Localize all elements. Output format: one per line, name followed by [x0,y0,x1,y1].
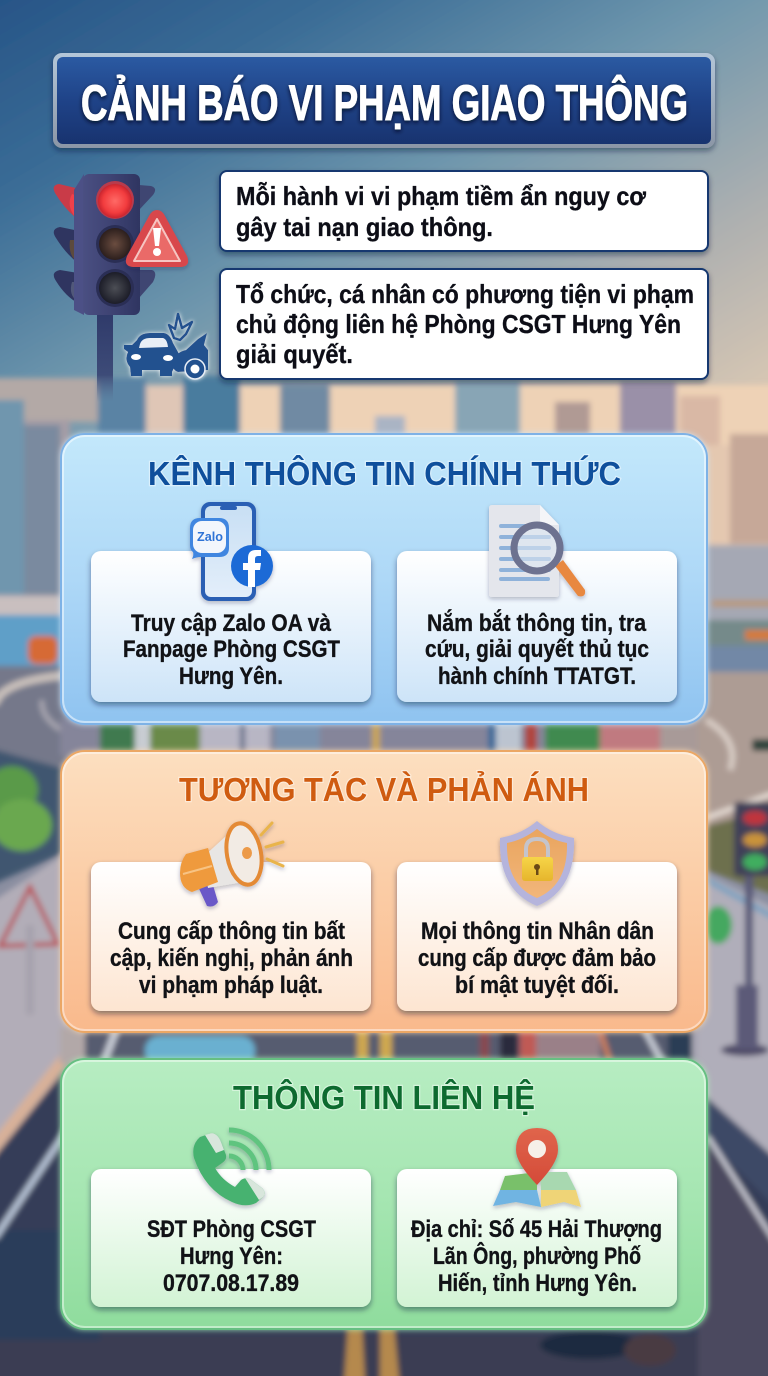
callout: contact instruction: chủ động liên hệ Phòng CSGT Hưng Yên [236,309,681,339]
card: confidentiality: bí mật tuyệt đối. [455,972,619,999]
card: Zalo and Fanpage: Truy cập Zalo OA và [131,610,332,637]
callout: risk statement: Mỗi hành vi vi phạm tiềm ẩn nguy cơ [236,181,646,211]
card: address: Lãn Ông, phường Phố [433,1242,641,1270]
icon: megaphone [180,821,283,906]
card: look up information: hành chính TTATGT. [438,663,636,690]
warning triangle [126,210,188,267]
card: report violations: vi phạm pháp luật. [139,972,323,999]
card: report violations [91,862,371,1011]
icon: document with magnifier [489,505,585,597]
icon: traffic light with warning sign [54,174,188,402]
pole [97,312,113,402]
heading: interaction and feedback: TƯƠNG TÁC VÀ PHẢN ÁNH [179,771,589,808]
card: Zalo and Fanpage: Fanpage Phòng CSGT [123,636,340,663]
card: report violations: Cung cấp thông tin bất [118,918,345,945]
callout: contact instruction: giải quyết. [236,339,353,369]
icon: car crash [124,314,208,379]
card: confidentiality [397,862,677,1011]
icon: shield with padlock [500,821,574,906]
icon: phone with Zalo and Facebook: Zalo [197,529,223,544]
card: Zalo and Fanpage: Hưng Yên. [179,663,283,690]
card: phone number: 0707.08.17.89 [163,1270,299,1297]
card: confidentiality: cung cấp được đảm bảo [418,945,656,972]
panel: interaction and feedback [61,751,707,1032]
card: address: Hiến, tỉnh Hưng Yên. [438,1270,637,1297]
callout: risk statement: gây tai nạn giao thông. [236,212,493,242]
card: phone number: SĐT Phòng CSGT [147,1216,316,1243]
title banner [53,53,715,148]
callout: contact instruction [220,269,708,379]
card: confidentiality: Mọi thông tin Nhân dân [421,918,654,945]
gap between orange and green panels [60,1028,710,1064]
callout: risk statement [220,171,708,251]
card: look up information [397,551,677,702]
card: Zalo and Fanpage [91,551,371,702]
panel: official channels [61,434,707,724]
icon: phone with Zalo and Facebook [190,502,273,601]
card: report violations: cập, kiến nghị, phản ánh [110,945,353,972]
panel: contact information [61,1059,707,1329]
right margin city [698,445,768,545]
card: phone number: Hưng Yên: [180,1243,283,1270]
heading: official channels: KÊNH THÔNG TIN CHÍNH THỨC [148,454,621,492]
icon: map pin [493,1128,581,1207]
card: look up information: cứu, giải quyết thủ tục [425,636,649,663]
road [0,1058,768,1376]
card: phone number [91,1169,371,1307]
callout: contact instruction: Tổ chức, cá nhân có phương tiện vi phạm [236,279,694,309]
card: look up information: Nắm bắt thông tin, tra [427,609,647,637]
card: address [397,1169,677,1307]
icon: phone handset [193,1130,269,1205]
heading: contact information: THÔNG TIN LIÊN HỆ [233,1078,535,1116]
gap between blue and orange panels [60,718,710,756]
card: address: Địa chỉ: Số 45 Hải Thượng [411,1216,662,1243]
